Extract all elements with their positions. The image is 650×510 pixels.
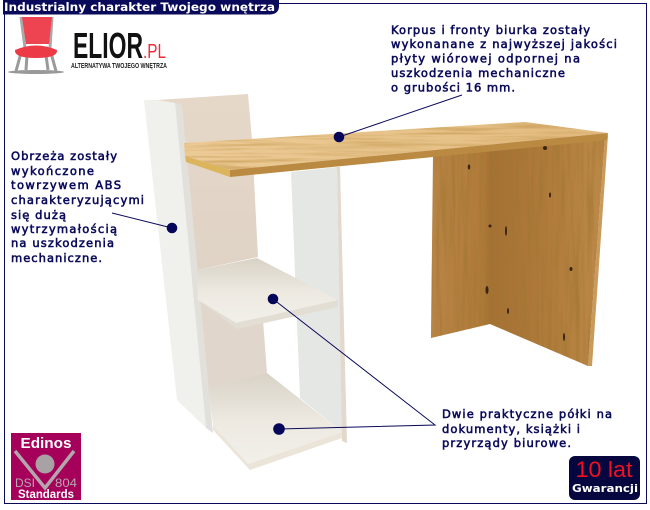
text block: się dużą bbox=[11, 208, 66, 222]
title bar: Industrialny charakter Twojego wnętrza bbox=[4, 0, 275, 14]
text block: Dwie praktyczne półki na bbox=[442, 407, 612, 421]
badge: Edinos Standards: Standards bbox=[18, 489, 74, 501]
leader lines bbox=[273, 299, 435, 429]
marker: lower shelf bbox=[273, 423, 285, 435]
callout: shelves bbox=[268, 294, 612, 450]
text block bbox=[442, 407, 612, 450]
text block: Korpus i fronty biurka zostały bbox=[391, 23, 590, 37]
badge: Edinos Standards: DSI bbox=[15, 476, 35, 490]
text block bbox=[391, 23, 617, 94]
text block: uszkodzenia mechaniczne bbox=[391, 66, 565, 80]
badge: 10 years warranty bbox=[569, 456, 640, 500]
leader line bbox=[339, 95, 462, 137]
right wooden leg bbox=[431, 135, 608, 366]
marker bbox=[334, 132, 344, 142]
logo: Elior bbox=[8, 17, 167, 74]
marker bbox=[167, 223, 177, 233]
upper shelf bbox=[197, 258, 338, 329]
text block: wytrzymałością bbox=[11, 222, 117, 236]
text block: dokumenty, książki i bbox=[442, 422, 580, 436]
illustration: desk with shelves bbox=[144, 94, 608, 470]
text block: mechaniczne. bbox=[11, 251, 102, 265]
shelf unit back panel bbox=[157, 94, 267, 388]
text block: Obrzeża zostały bbox=[11, 149, 117, 163]
callout: desk material bbox=[334, 23, 617, 142]
badge: Edinos Standards: Edinos bbox=[20, 435, 72, 452]
text block: przyrządy biurowe. bbox=[442, 436, 571, 450]
shelf unit right panel bbox=[291, 167, 347, 443]
leader line bbox=[112, 213, 172, 228]
shelf unit side panel bbox=[144, 100, 213, 433]
marker: upper shelf bbox=[268, 294, 278, 304]
logo tagline: ALTERNATYWA TWOJEGO WNĘTRZA bbox=[71, 63, 167, 70]
icon: red chair bbox=[8, 17, 64, 74]
badge: 10 years warranty: 10 lat bbox=[576, 457, 632, 482]
text block: wykonanane z najwyższej jakości bbox=[391, 37, 617, 51]
text block: wykończone bbox=[11, 164, 94, 178]
wooden desk top bbox=[184, 122, 608, 177]
badge: Edinos Standards bbox=[11, 433, 81, 501]
logo wordmark: ELIOR bbox=[73, 25, 143, 66]
logo: Elior: .PL bbox=[143, 41, 166, 63]
wood knots bbox=[468, 146, 572, 341]
text block: towrzywem ABS bbox=[11, 178, 121, 192]
text block: o grubości 16 mm. bbox=[391, 80, 515, 94]
text block: charakteryzującymi bbox=[11, 193, 144, 207]
badge: Edinos Standards: 804 bbox=[55, 476, 77, 490]
lower shelf bbox=[208, 373, 342, 470]
callout: ABS edges bbox=[11, 149, 177, 265]
text block: płyty wiórowej odpornej na bbox=[391, 52, 580, 66]
badge: 10 years warranty: Gwarancji bbox=[572, 482, 638, 495]
text block bbox=[11, 149, 144, 265]
text block: na uszkodzenia bbox=[11, 236, 114, 250]
